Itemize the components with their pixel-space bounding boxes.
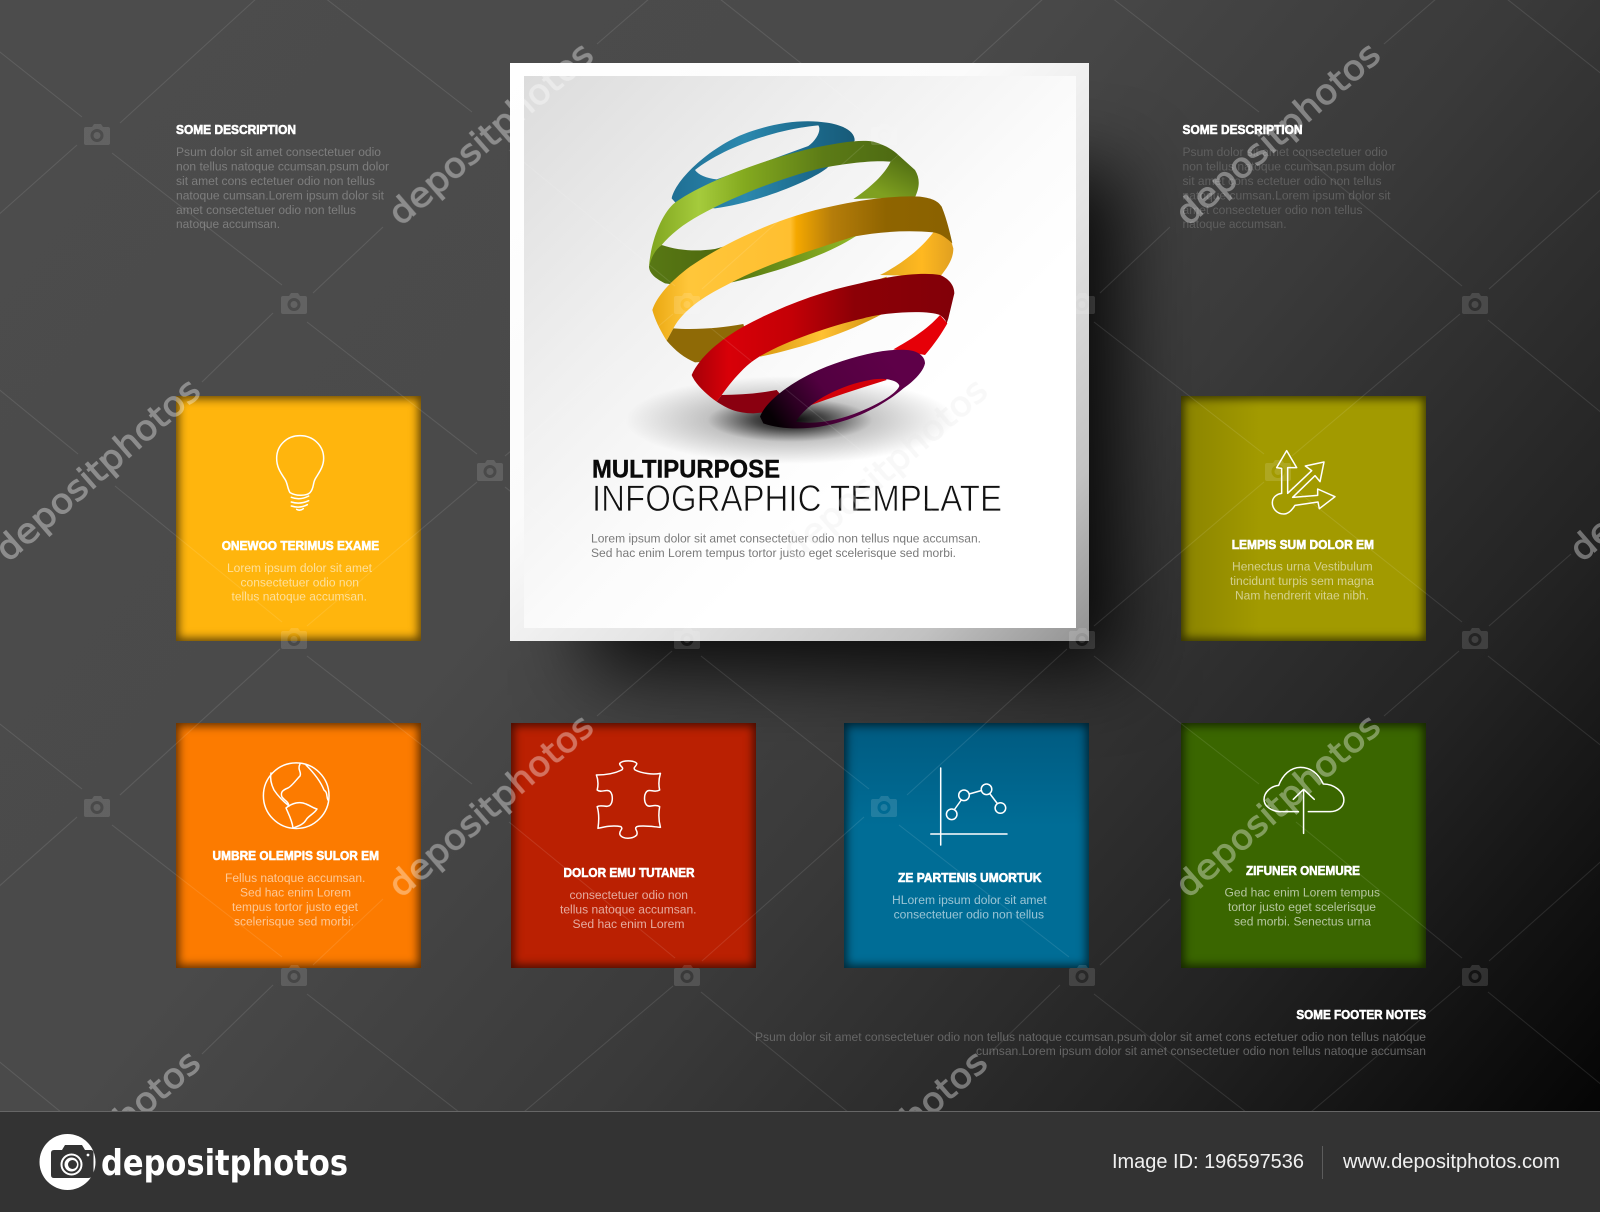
icon: light bulb <box>277 436 324 510</box>
watermark text: depositphotos <box>381 34 602 234</box>
icon: line chart <box>931 768 1007 845</box>
body text: tincidunt turpis sem magna <box>1230 574 1374 588</box>
heading: UMBRE OLEMPIS SULOR EM <box>212 848 379 863</box>
text block: top left description <box>176 122 389 231</box>
ribbon: purple <box>760 350 925 428</box>
icon: globe <box>263 763 329 828</box>
text block: top right description: amet consectetuer odio non tellus <box>1182 203 1362 217</box>
icon: branching arrows <box>1272 451 1335 514</box>
body text: Lorem ipsum dolor sit amet <box>227 561 373 575</box>
text block: top right description: sit amet cons ectetuer odio non tellus <box>1182 174 1382 188</box>
text block: footer notes: Psum dolor sit amet consectetuer odio non tellus natoque ccumsan.psum dolor sit amet cons ectetuer odio non tellus natoque <box>755 1030 1426 1044</box>
ribbon sphere logo <box>649 121 954 428</box>
watermark text: depositphotos <box>381 706 602 906</box>
heading: ZIFUNER ONEMURE <box>1246 863 1360 878</box>
website url: www.depositphotos.com <box>1342 1150 1560 1173</box>
ribbon: red front <box>692 274 954 402</box>
body text: Henectus urna Vestibulum <box>1232 560 1373 574</box>
body text: consectetuer odio non <box>240 576 359 590</box>
title: INFOGRAPHIC TEMPLATE <box>592 478 1002 519</box>
panel: green tile <box>1181 723 1426 968</box>
main card drop shadow <box>590 170 1120 670</box>
heading: DOLOR EMU TUTANER <box>563 865 695 880</box>
text block: top right description <box>1182 122 1396 231</box>
main card graphics and text <box>591 121 1002 560</box>
watermark cameras <box>84 124 1488 986</box>
text block: top right description: non tellus natoque ccumsan.psum dolor <box>1182 160 1396 174</box>
body text: Fellus natoque accumsan. <box>225 871 365 885</box>
body text: tortor justo eget scelerisque <box>1228 900 1376 914</box>
icon: depositphotos camera logo <box>40 1134 96 1190</box>
footer bar <box>0 1111 1600 1212</box>
text block: top left description: natoque accumsan. <box>176 217 280 231</box>
text block: top left description: non tellus natoque ccumsan.psum dolor <box>176 160 389 174</box>
heading: ONEWOO TERIMUS EXAME <box>222 538 379 553</box>
body text: Sed hac enim Lorem <box>572 917 684 931</box>
panel: olive tile <box>1181 396 1426 641</box>
body text: consectetuer odio non <box>569 888 688 902</box>
text block: top left description: sit amet cons ectetuer odio non tellus <box>176 174 375 188</box>
text block: footer notes <box>755 1007 1426 1058</box>
body text: HLorem ipsum dolor sit amet <box>892 893 1047 907</box>
ribbon: gold back <box>667 324 753 362</box>
panel: yellow tile <box>176 396 421 641</box>
text block: top right description: Psum dolor sit amet consectetuer odio <box>1182 145 1388 159</box>
body text: scelerisque sed morbi. <box>234 914 354 928</box>
body text: Ged hac enim Lorem tempus <box>1224 886 1380 900</box>
icon: cloud upload <box>1264 767 1344 833</box>
ribbon: red back <box>717 390 793 413</box>
body text <box>1230 560 1374 602</box>
body text: tellus natoque accumsan. <box>560 902 696 916</box>
text block: top right description: SOME DESCRIPTION <box>1182 122 1302 137</box>
text block: top left description: SOME DESCRIPTION <box>176 122 296 137</box>
card description <box>591 532 981 560</box>
body text: sed morbi. Senectus urna <box>1234 914 1371 928</box>
ribbon: gold front <box>652 196 952 341</box>
panel: red tile <box>510 723 756 968</box>
body text <box>227 561 373 604</box>
body text: tellus natoque accumsan. <box>232 590 367 604</box>
image id: Image ID: 196597536 <box>1112 1150 1304 1173</box>
card description: Lorem ipsum dolor sit amet consectetuer odio non tellus nque accumsan. <box>591 532 981 546</box>
logo wordmark: depositphotos <box>101 1143 348 1184</box>
watermark text: depositphotos <box>1168 34 1389 234</box>
text block: top left description: Psum dolor sit amet consectetuer odio <box>176 145 381 159</box>
watermark text: depositphotos <box>1168 706 1389 906</box>
body text: tempus tortor justo eget <box>232 900 359 914</box>
text block: top left description: natoque cumsan.Lorem ipsum dolor sit <box>176 188 385 202</box>
card description: Sed hac enim Lorem tempus tortor justo eget scelerisque sed morbi. <box>591 546 956 560</box>
heading: LEMPIS SUM DOLOR EM <box>1232 537 1374 552</box>
card inner gradient <box>524 76 1076 628</box>
ribbon: green front <box>649 141 898 267</box>
body text <box>892 893 1047 922</box>
panel: main card <box>510 63 1089 641</box>
separator <box>1322 1146 1323 1179</box>
title <box>592 456 1002 519</box>
text block: footer notes: cumsan.Lorem ipsum dolor sit amet consectetuer odio non tellus natoque accumsan <box>976 1044 1426 1058</box>
body text: Nam hendrerit vitae nibh. <box>1235 588 1369 602</box>
title: MULTIPURPOSE <box>592 456 780 484</box>
icon: puzzle piece <box>596 761 660 838</box>
text block: top left description: amet consectetuer odio non tellus <box>176 203 356 217</box>
body text <box>1224 886 1380 928</box>
body text <box>560 888 696 931</box>
ribbon: blue <box>672 121 855 208</box>
body text <box>225 871 365 928</box>
body text: consectetuer odio non tellus <box>894 908 1044 922</box>
heading: ZE PARTENIS UMORTUK <box>898 870 1042 885</box>
body text: Sed hac enim Lorem <box>240 886 351 900</box>
panel: blue tile <box>844 723 1089 968</box>
text block: top right description: natoque accumsan. <box>1182 217 1286 231</box>
ribbon: green back <box>649 210 860 286</box>
sphere ground shadow <box>625 376 955 464</box>
text block: top right description: natoque cumsan.Lorem ipsum dolor sit <box>1182 188 1391 202</box>
panel: orange tile <box>176 723 421 968</box>
watermark text: depositphotos <box>775 370 996 570</box>
